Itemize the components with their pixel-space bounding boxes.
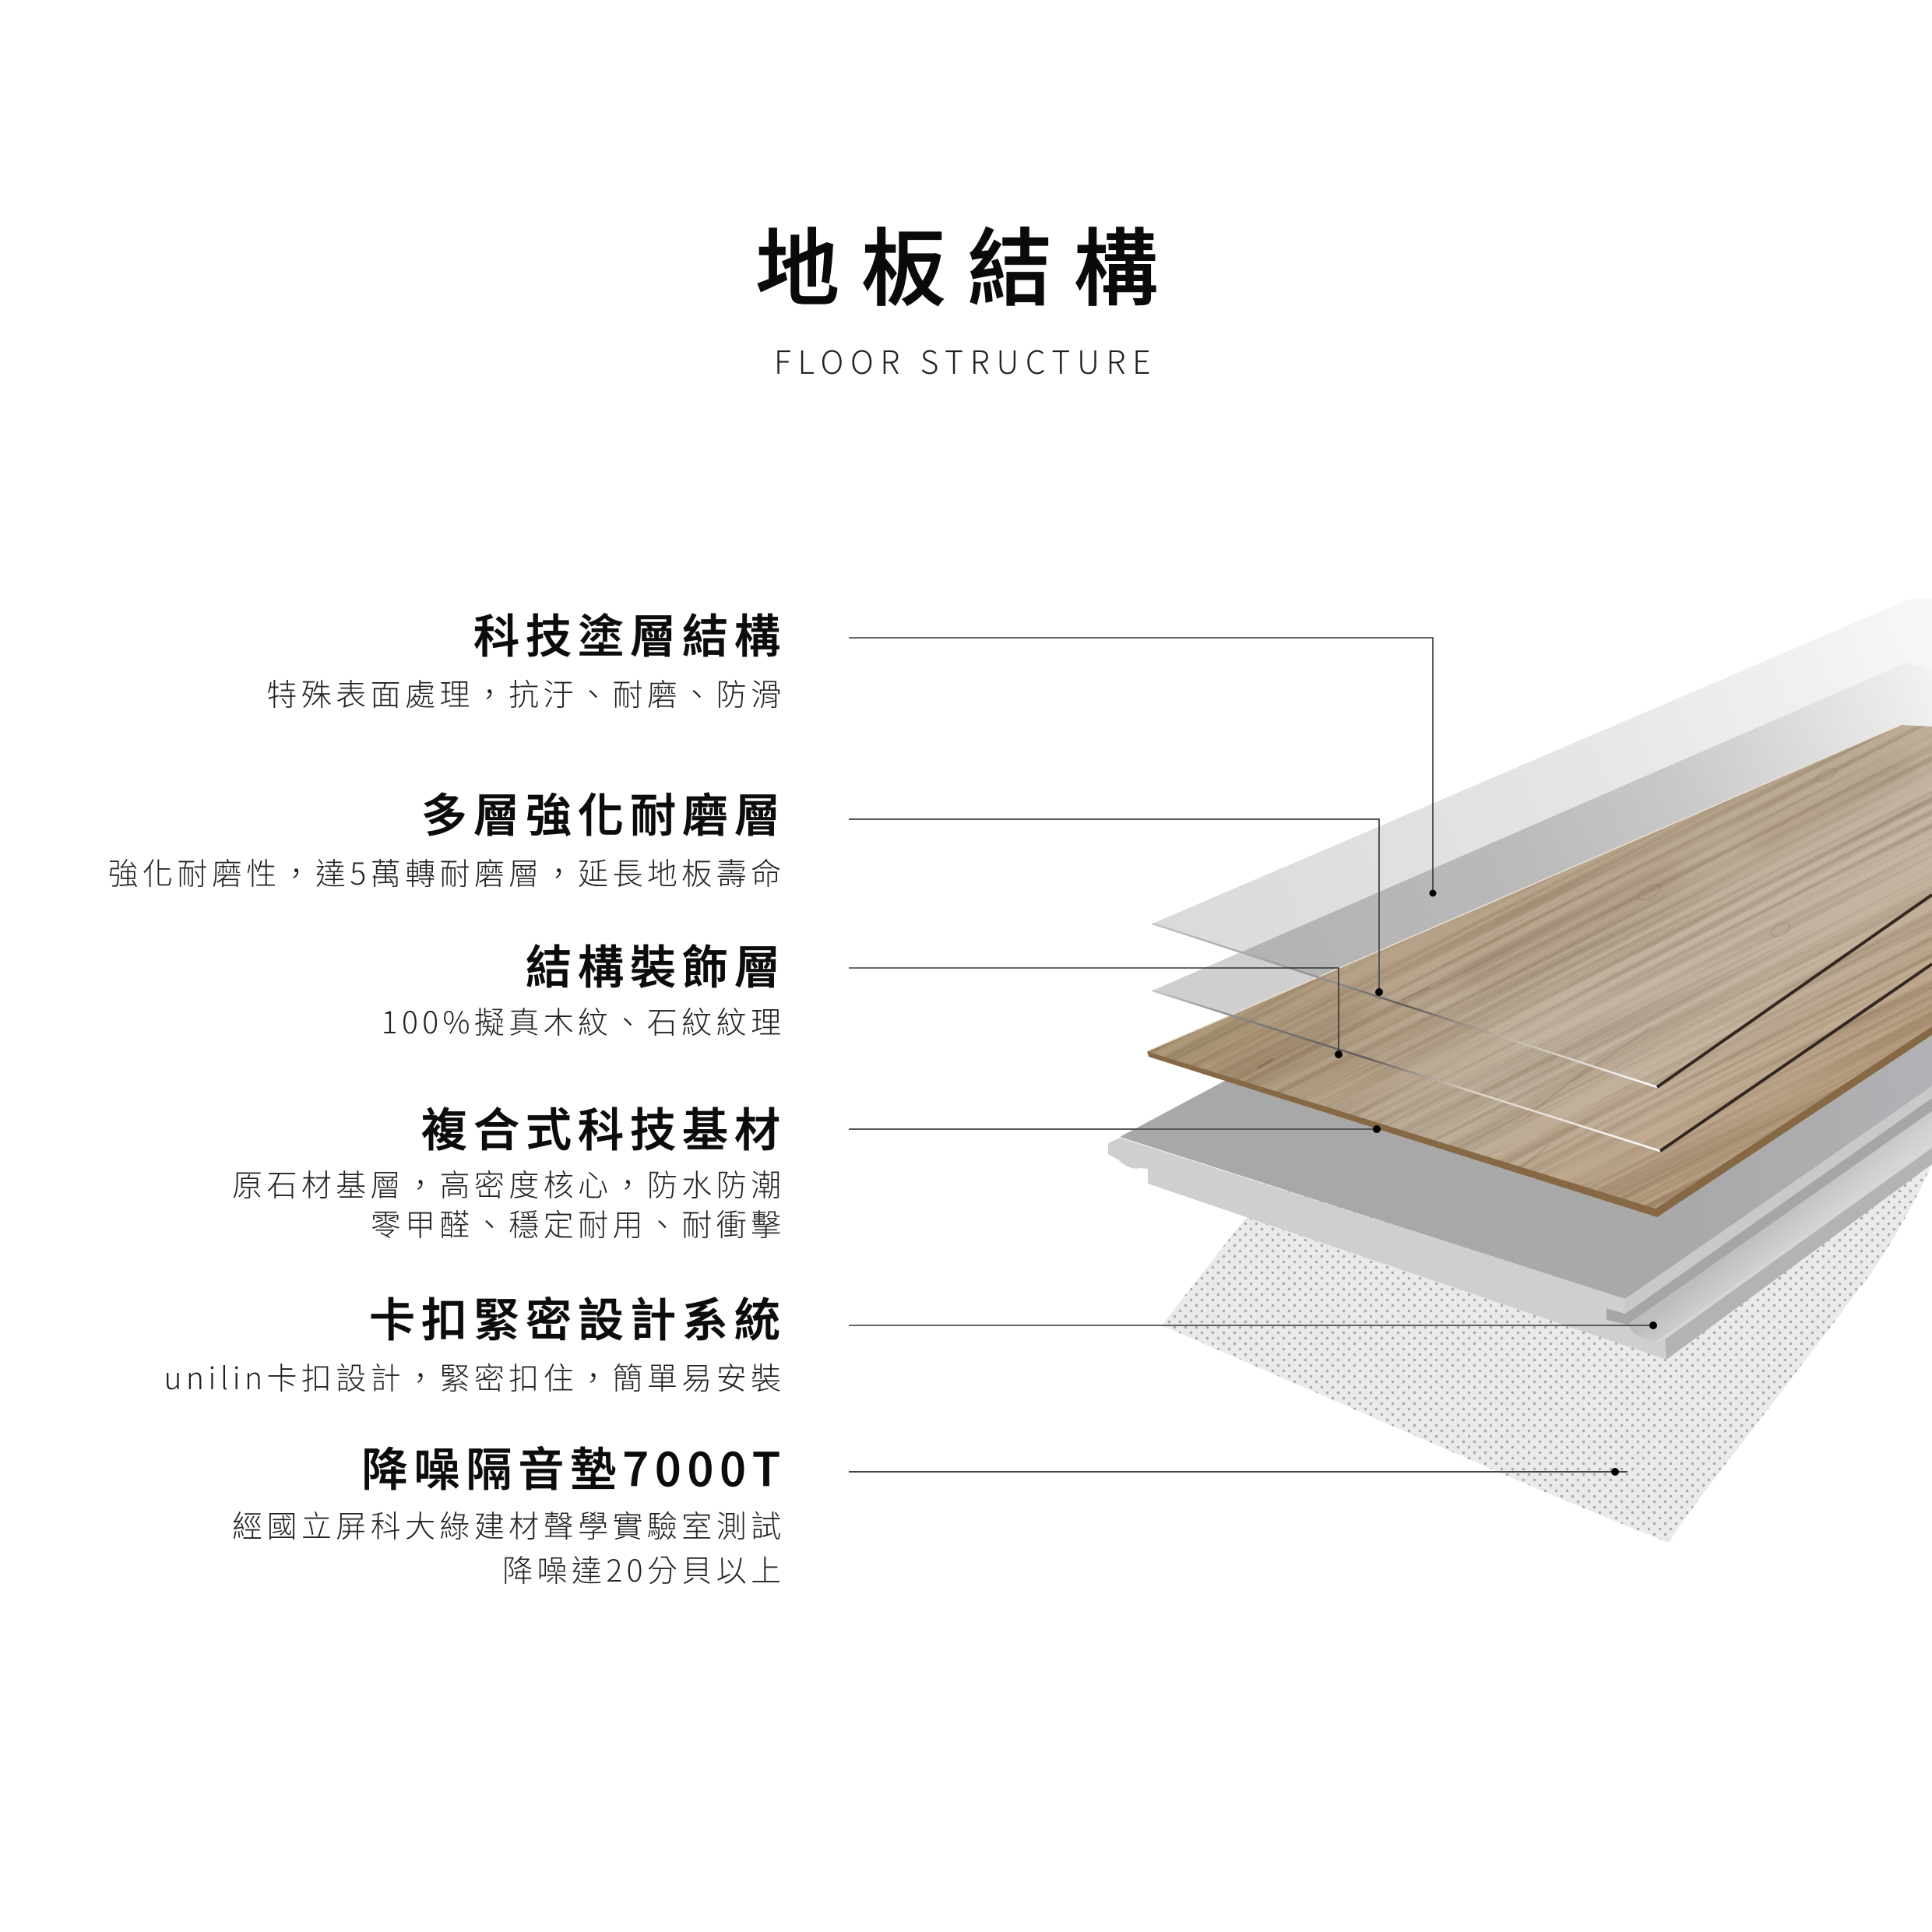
heading: click system: 卡扣緊密設計系統 <box>369 1283 787 1350</box>
heading: wear layer: 多層強化耐磨層 <box>421 779 787 845</box>
wood tonal bands <box>1215 763 1908 1082</box>
leader line: tech coating <box>849 638 1436 897</box>
front face with tongue profile <box>1108 1138 1666 1360</box>
wood thickness edge <box>1147 1026 1932 1217</box>
heading: tech coating: 科技塗層結構 <box>473 600 787 666</box>
leader line: underlay <box>849 1468 1628 1476</box>
right side face <box>1665 1148 1932 1360</box>
text block: wear layer <box>108 779 787 894</box>
text block: underlay <box>232 1433 787 1591</box>
heading: underlay: 降噪隔音墊7000T <box>361 1433 787 1499</box>
description: underlay <box>232 1503 785 1591</box>
description: composite core: 原石材基層，高密度核心，防水防潮 <box>232 1162 785 1205</box>
base board: composite core <box>1108 779 1932 1360</box>
wood knots and cracks <box>1258 765 1838 1199</box>
description: composite core: 零甲醛、穩定耐用、耐衝擊 <box>371 1202 785 1245</box>
description: click system: unilin卡扣設計，緊密扣住，簡單易安裝 <box>164 1355 785 1399</box>
heading: composite core: 複合式科技基材 <box>421 1093 787 1160</box>
underlay: acoustic pad with dot texture <box>1162 1164 1932 1543</box>
leader line: decor layer <box>849 968 1343 1058</box>
click groove <box>1628 1111 1932 1342</box>
translucent sheet: tech coating <box>1153 598 1932 1087</box>
description: underlay: 降噪達20分貝以上 <box>502 1547 785 1591</box>
sheet tint over wood <box>1153 663 1932 1151</box>
description: wear layer: 強化耐磨性，達5萬轉耐磨層，延長地板壽命 <box>108 850 785 894</box>
leader line: wear layer <box>849 819 1383 996</box>
groove lip <box>1656 1145 1932 1342</box>
description: composite core <box>232 1162 785 1245</box>
decor wood layer <box>1146 724 1932 1217</box>
leader line: core <box>849 1125 1381 1133</box>
text block: click system <box>164 1283 787 1399</box>
base right edge strip <box>1625 1086 1932 1314</box>
title: 地板結構 <box>755 202 1180 323</box>
description: underlay: 經國立屏科大綠建材聲學實驗室測試 <box>232 1503 785 1547</box>
leader line: click system <box>849 1321 1657 1329</box>
text block: decor layer <box>382 931 787 1043</box>
heading: decor layer: 結構裝飾層 <box>526 931 787 997</box>
wood highlight edge <box>1147 725 1901 1051</box>
sheet edges: highlight and shadow lines <box>1153 895 1932 1151</box>
description: decor layer: 100%擬真木紋、石紋紋理 <box>382 999 785 1043</box>
description: tech coating: 特殊表面處理，抗汙、耐磨、防滑 <box>266 671 785 715</box>
text block: tech coating <box>266 600 787 715</box>
base top surface <box>1120 779 1932 1299</box>
translucent sheet: wear layer <box>1153 663 1932 1151</box>
subtitle: FLOOR STRUCTURE <box>774 336 1157 383</box>
text block: composite core <box>232 1093 787 1245</box>
locking slot <box>1606 1098 1932 1325</box>
